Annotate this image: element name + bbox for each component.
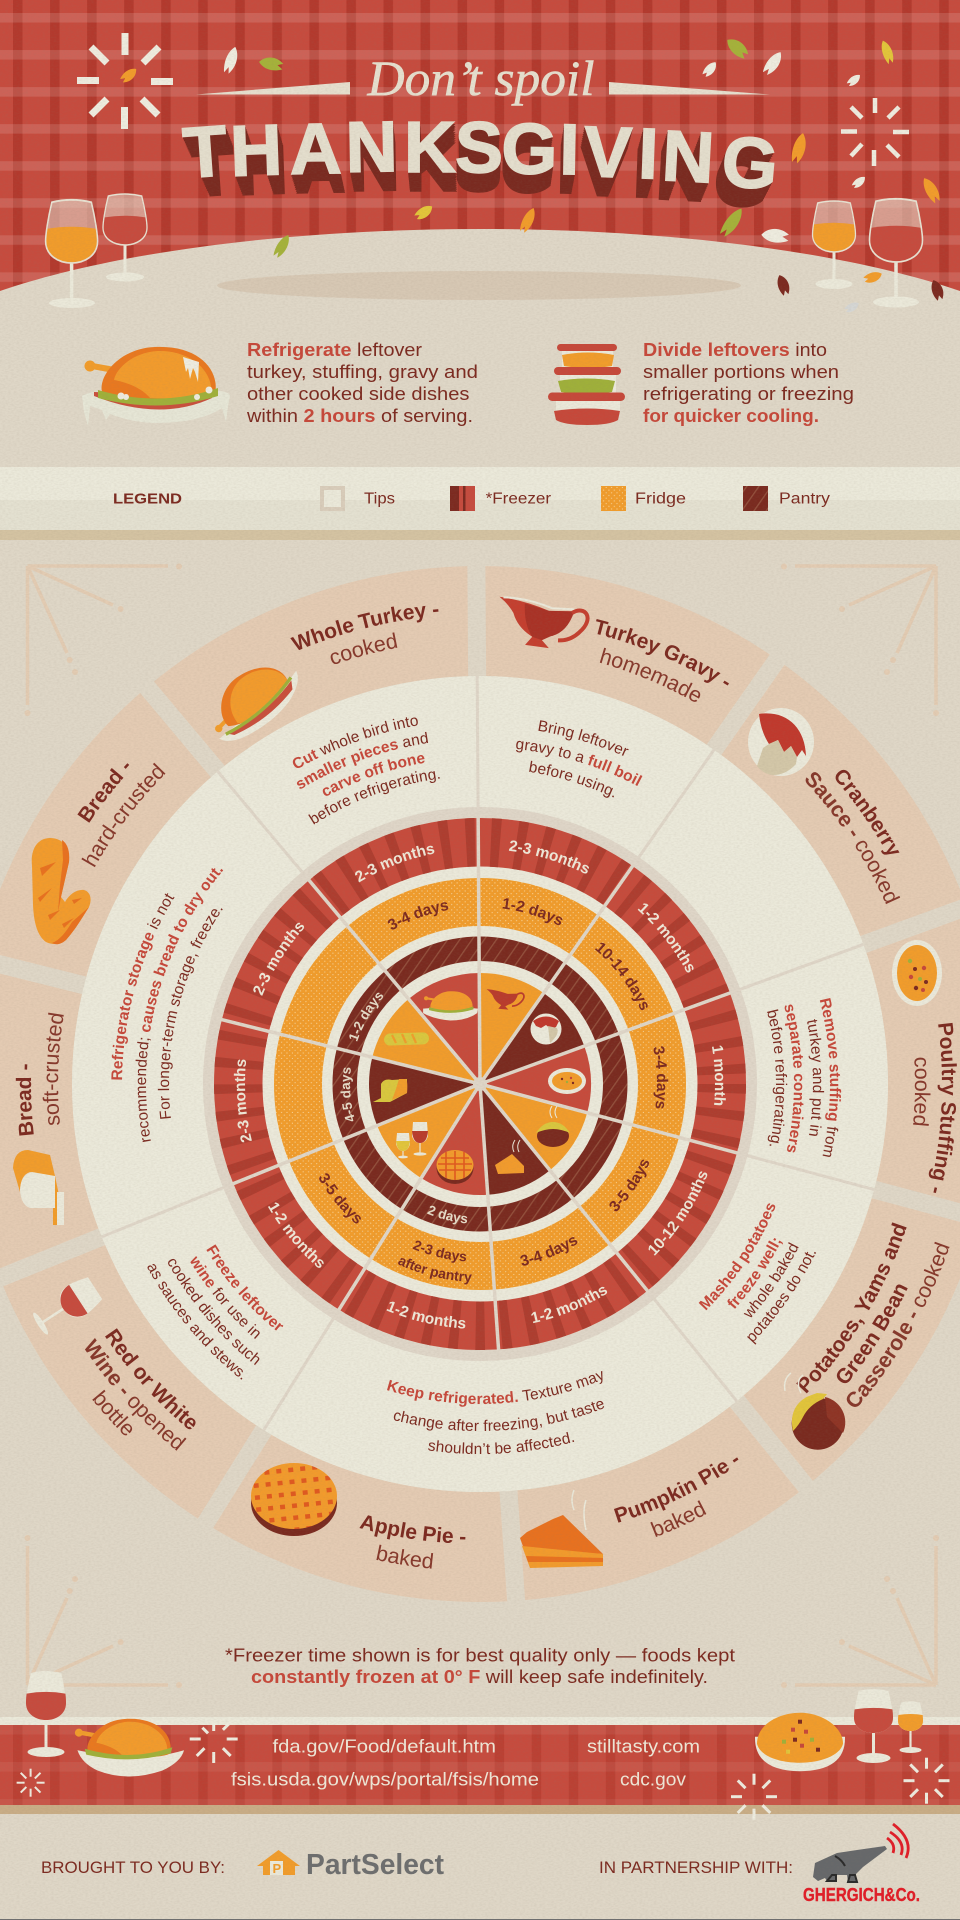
tip: whole turkey xyxy=(292,717,440,824)
label: turkey gravy: homemade xyxy=(595,641,708,709)
legend: pantry: Pantry xyxy=(779,490,830,508)
icon: mini potato in pie xyxy=(536,1106,570,1147)
title: THANKSGIVING: THANKSGIVING xyxy=(184,116,777,213)
freezer labels: 2-3 months xyxy=(234,1060,252,1142)
legend: pantry xyxy=(743,486,830,511)
fridge labels: 2-3 days xyxy=(412,1240,466,1263)
tip: pies: Keep refrigerated. Texture may xyxy=(387,1370,602,1407)
taupe edge ring xyxy=(208,812,752,1356)
label: apple pie: Apple Pie - xyxy=(357,1510,469,1552)
sunburst: top right xyxy=(841,98,909,166)
fridge labels: 3-4 days xyxy=(654,1046,668,1108)
label: bread soft-crusted: Bread - xyxy=(12,1062,39,1137)
label: apple pie xyxy=(357,1510,469,1575)
icon: mini wine glasses in pie xyxy=(396,1122,428,1158)
tip: pies: shouldn’t be affected. xyxy=(428,1432,574,1454)
tip: pies xyxy=(384,1366,608,1462)
text: divide leftovers tip: smaller portions when xyxy=(643,361,839,382)
icon: baked potato casserole xyxy=(782,1373,853,1459)
icon: mini pumpkin slice in pie xyxy=(495,1140,524,1174)
footer band xyxy=(0,1717,960,1814)
legend: fridge: Fridge xyxy=(635,490,686,508)
tip: bread: recommended; causes bread to dry out. xyxy=(107,853,229,1148)
tip: bread: Refrigerator storage is not xyxy=(96,886,180,1085)
icon: footer stuffing bowl xyxy=(755,1713,845,1771)
tips ring xyxy=(72,676,888,1492)
tip: pies: change after freezing, but taste xyxy=(394,1400,604,1431)
tip: potatoes: Mashed potatoes xyxy=(698,1203,776,1310)
label: pumpkin pie: Pumpkin Pie - xyxy=(609,1446,747,1533)
logo: Ghergich and Co xyxy=(803,1824,920,1905)
logo: PartSelect: PartSelect xyxy=(306,1849,444,1881)
label: bread soft-crusted xyxy=(12,1010,69,1137)
text: refrigerate tip xyxy=(246,339,478,426)
text: freezer footnote: constantly frozen at 0° F will keep safe indefinitely. xyxy=(251,1666,708,1687)
icon: mini bread loaf in pie xyxy=(373,1079,407,1102)
text: divide leftovers tip: refrigerating or freezing xyxy=(643,383,854,404)
fridge labels: 1-2 days xyxy=(502,898,562,926)
tip: wine: Freeze leftover xyxy=(199,1240,288,1339)
wine glass: header left large xyxy=(46,200,98,308)
tip: bread xyxy=(96,853,229,1148)
label: potatoes yams green bean casserole xyxy=(790,1216,960,1418)
title: THANKSGIVING: THANKSGIVING xyxy=(181,109,780,208)
freezer ring xyxy=(238,842,722,1326)
tip: turkey gravy: Bring leftover xyxy=(538,720,629,756)
icon: pumpkin pie slice xyxy=(520,1490,603,1568)
corner ornament: bottom right xyxy=(781,1535,939,1688)
label: poultry stuffing xyxy=(908,1020,960,1197)
tip: poultry stuffing: Remove stuffing from xyxy=(820,998,842,1157)
freezer labels: 2-3 months xyxy=(253,922,304,996)
icon: cranberry sauce bowl xyxy=(748,708,814,776)
icon: gravy boat xyxy=(493,596,589,653)
text: divide leftovers tip: for quicker cooling. xyxy=(643,405,819,426)
bottom edge xyxy=(0,1919,960,1920)
legend: freezer: *Freezer xyxy=(486,490,551,508)
tip: poultry stuffing: turkey and put in xyxy=(807,1019,824,1136)
text: refrigerate tip: within 2 hours of serving. xyxy=(246,405,473,426)
tip: whole turkey: Cut whole bird into xyxy=(292,717,418,768)
label: poultry stuffing: cooked xyxy=(908,1056,935,1128)
wine glass: header right small xyxy=(812,201,856,289)
icon: mini gravy boat in pie xyxy=(485,989,524,1011)
title: Don't spoil: Don’t spoil xyxy=(366,50,594,106)
label: apple pie: baked xyxy=(374,1541,436,1575)
label: pumpkin pie: baked xyxy=(647,1496,710,1543)
title: THANKSGIVING: THANKSGIVING xyxy=(190,127,771,223)
label: bread hard-crusted: Bread - xyxy=(73,754,138,828)
icon: footer turkey on plate xyxy=(75,1719,184,1776)
plaid tablecloth header xyxy=(0,0,960,300)
title: THANKSGIVING: THANKSGIVING xyxy=(186,119,775,216)
title: THANKSGIVING: THANKSGIVING xyxy=(188,122,773,220)
fridge labels: 10-14 days xyxy=(595,942,648,1010)
tip: wine: wine for use in xyxy=(182,1251,266,1345)
icon: mini baguette in pie xyxy=(384,1032,429,1046)
tip: turkey gravy: before using. xyxy=(529,760,614,798)
outer food band xyxy=(17,621,943,1547)
wine glass: header right large xyxy=(870,199,922,308)
freezer labels: 1-2 months xyxy=(638,903,694,972)
freezer labels xyxy=(234,840,726,1328)
tip: poultry stuffing: separate containers xyxy=(784,1004,804,1152)
title: THANKSGIVING: THANKSGIVING xyxy=(189,125,772,222)
tip: potatoes: freeze well; xyxy=(727,1238,783,1309)
legend: fridge xyxy=(601,486,686,511)
tip: whole turkey: before refrigerating. xyxy=(308,771,440,824)
title: Don't spoil xyxy=(196,50,770,106)
freezer labels: 2-3 months xyxy=(355,846,434,882)
label: cranberry sauce: Cranberry xyxy=(827,763,908,863)
freezer labels: 1-2 months xyxy=(531,1286,608,1324)
icon: whole turkey on platter xyxy=(196,648,311,750)
falling leaves xyxy=(119,35,946,314)
label: red or white wine: Wine - opened xyxy=(75,1333,192,1459)
freezer labels: 1-2 months xyxy=(386,1302,466,1328)
label: potatoes yams green bean casserole: Potatoes, Yams and xyxy=(790,1216,921,1403)
title: THANKSGIVING: THANKSGIVING xyxy=(183,113,778,211)
sunburst: footer group xyxy=(17,1722,950,1820)
icon: mini stuffing in pie xyxy=(548,1068,586,1094)
table top xyxy=(0,229,960,320)
label: turkey gravy: Turkey Gravy - xyxy=(588,610,738,695)
fridge labels: after pantry xyxy=(398,1258,472,1284)
footer links: fda.gov/Food/default.htm xyxy=(272,1736,496,1756)
pantry labels xyxy=(340,992,468,1224)
tip: potatoes: potatoes do not. xyxy=(747,1252,816,1345)
outer band gaps xyxy=(0,554,960,1613)
icon: soft bread loaf xyxy=(13,1150,64,1225)
legend: tips xyxy=(322,488,395,509)
icon: mini apple pie in pie xyxy=(436,1150,474,1184)
tip: potatoes xyxy=(695,1197,824,1348)
pantry labels: 2 days xyxy=(427,1206,468,1224)
tip: turkey gravy xyxy=(512,715,646,802)
freezer labels: 10-12 months xyxy=(648,1171,708,1256)
icon: apple pie xyxy=(251,1463,337,1536)
label: whole turkey: Whole Turkey - xyxy=(288,592,444,657)
icon: frosted turkey on plate xyxy=(82,347,230,426)
icon: hard bread baguettes xyxy=(32,838,91,944)
fridge labels: 3-5 days xyxy=(319,1173,361,1224)
text: refrigerate tip: Refrigerate leftover xyxy=(247,339,422,360)
credit: in partnership with: IN PARTNERSHIP WITH: xyxy=(599,1859,793,1877)
legend: freezer xyxy=(450,486,551,511)
tip: turkey gravy: gravy to a full boil xyxy=(516,740,642,786)
tips ring dividers xyxy=(102,676,874,1430)
label: bread hard-crusted: hard-crusted xyxy=(74,757,172,873)
tip: wine: cooked dishes such xyxy=(158,1252,266,1373)
footer links xyxy=(231,1736,700,1790)
icon: stacked food containers xyxy=(548,344,625,425)
freezer labels: 1 month xyxy=(712,1046,726,1106)
table shadow xyxy=(217,271,741,300)
corner ornament: top left xyxy=(24,564,182,716)
wine glass: footer left xyxy=(26,1671,66,1757)
tip: whole turkey: smaller pieces and xyxy=(296,732,428,789)
footer links: fsis.usda.gov/wps/portal/fsis/home xyxy=(231,1770,539,1790)
storage wheel xyxy=(0,566,960,1602)
label: bread soft-crusted: soft-crusted xyxy=(37,1010,69,1128)
fridge labels: 3-4 days xyxy=(520,1237,578,1266)
sunburst: top left xyxy=(77,33,173,129)
icon: mini turkey in pie xyxy=(423,991,478,1020)
legend: tips: Tips xyxy=(364,490,395,508)
tip: bread: For longer-term storage, freeze. xyxy=(138,896,228,1124)
fridge labels xyxy=(319,898,668,1284)
logo: Ghergich and Co: GHERGICH&Co. xyxy=(803,1885,920,1905)
title: THANKSGIVING: THANKSGIVING xyxy=(182,111,779,210)
fridge labels: 3-5 days xyxy=(610,1160,649,1212)
corner ornament: top right xyxy=(781,564,939,716)
footer links: stilltasty.com xyxy=(587,1736,700,1756)
label: red or white wine: bottle xyxy=(87,1386,141,1442)
text: freezer footnote: *Freezer time shown is for best quality only — foods kept xyxy=(225,1645,735,1666)
title: THANKSGIVING: THANKSGIVING xyxy=(185,118,776,215)
wine glass: header left small xyxy=(103,194,147,282)
title: THANKSGIVING: THANKSGIVING xyxy=(187,121,774,218)
label: poultry stuffing: Poultry Stuffing - xyxy=(924,1020,960,1197)
ring spokes xyxy=(218,814,741,1353)
text: refrigerate tip: other cooked side dishes xyxy=(247,383,470,404)
tip: poultry stuffing: before refrigerating. xyxy=(767,1009,788,1146)
label: cranberry sauce: Sauce - cooked xyxy=(797,763,909,911)
freezer labels: 1-2 months xyxy=(268,1202,324,1268)
tip: wine: as sauces and stews. xyxy=(137,1257,253,1389)
text: freezer footnote xyxy=(225,1645,735,1687)
label: potatoes yams green bean casserole: Green Bean xyxy=(830,1277,916,1391)
label: whole turkey: cooked xyxy=(326,627,401,670)
tip: wine xyxy=(137,1240,288,1389)
text: divide leftovers tip xyxy=(643,339,854,426)
freezer labels: 2-3 months xyxy=(508,840,589,874)
label: potatoes yams green bean casserole: Casserole - cooked xyxy=(838,1235,960,1418)
icon: mini cranberry in pie xyxy=(530,1014,562,1044)
fridge ring xyxy=(298,902,662,1266)
tip: whole turkey: carve off bone xyxy=(322,755,425,796)
pantry labels: 4-5 days xyxy=(340,1068,354,1122)
logo: PartSelect: P xyxy=(272,1861,282,1876)
wine glass: footer right large xyxy=(854,1689,893,1763)
icon: stuffing bowl xyxy=(892,940,942,1006)
corner ornament: bottom left xyxy=(24,1535,182,1688)
legend title: LEGEND xyxy=(113,490,182,508)
center pie wedges xyxy=(402,1006,558,1162)
pantry ring xyxy=(345,949,615,1219)
tip: potatoes: whole baked xyxy=(744,1242,799,1318)
fridge labels: 3-4 days xyxy=(388,902,448,930)
icon: tipped wine glass xyxy=(29,1274,104,1340)
label: red or white wine: Red or White xyxy=(97,1323,204,1438)
wine glass: footer right small xyxy=(898,1701,923,1753)
text: divide leftovers tip: Divide leftovers into xyxy=(643,339,827,360)
credit: brought to you by: BROUGHT TO YOU BY: xyxy=(41,1859,225,1877)
footer links: cdc.gov xyxy=(620,1770,686,1790)
text: refrigerate tip: turkey, stuffing, gravy and xyxy=(247,361,478,382)
title: THANKSGIVING: THANKSGIVING xyxy=(181,107,781,206)
legend band xyxy=(0,467,960,540)
tip: poultry stuffing xyxy=(763,996,844,1160)
pantry labels: 1-2 days xyxy=(349,992,383,1042)
